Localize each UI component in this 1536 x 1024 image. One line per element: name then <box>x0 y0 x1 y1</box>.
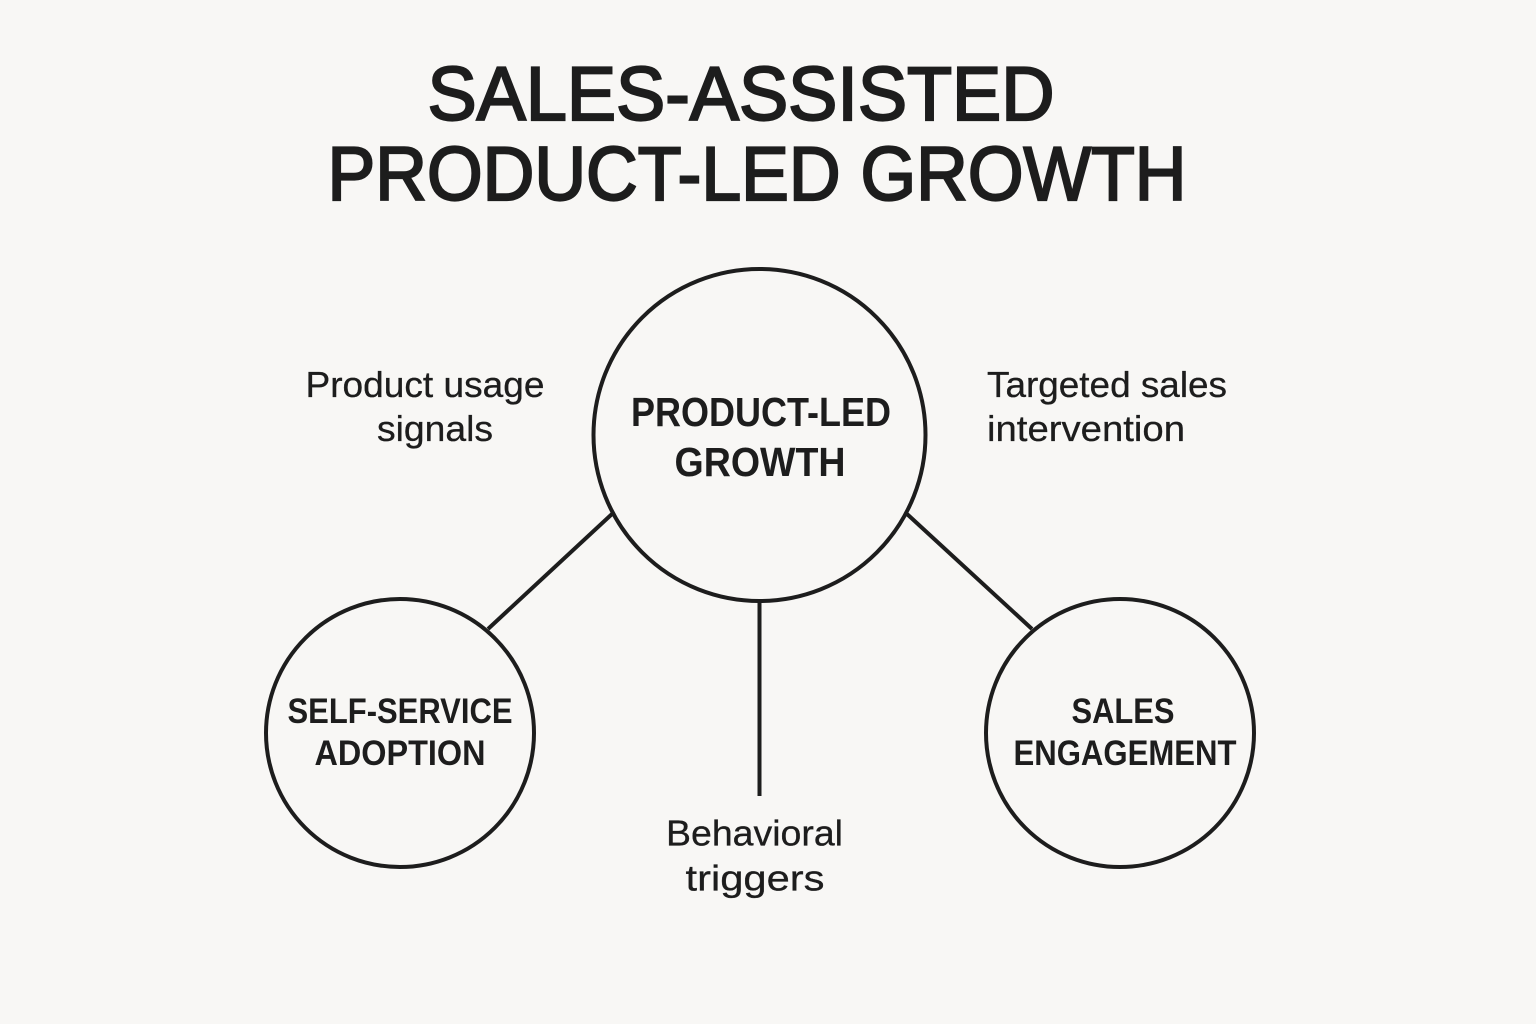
label: behavioral triggers: triggers <box>686 858 824 898</box>
circle: sales engagement: ENGAGEMENT <box>1014 734 1236 773</box>
label: product usage signals: Product usage <box>306 364 544 405</box>
label: targeted sales intervention: intervention <box>987 408 1185 449</box>
circle: sales engagement: SALES <box>1072 692 1174 731</box>
circle: self-service adoption: ADOPTION <box>314 734 486 773</box>
circle: product-led growth: PRODUCT-LED <box>631 389 891 435</box>
title: PRODUCT-LED GROWTH <box>328 132 1186 217</box>
circle: product-led growth <box>594 269 926 601</box>
connector: center to sales engagement <box>907 514 1032 629</box>
label: targeted sales intervention: Targeted sales <box>987 364 1227 405</box>
label: product usage signals <box>306 364 544 449</box>
circle: product-led growth: GROWTH <box>674 439 846 485</box>
label: product usage signals: signals <box>377 408 493 449</box>
connector: center to behavioral triggers <box>758 601 762 796</box>
label: behavioral triggers: Behavioral <box>666 812 843 854</box>
circle: self-service adoption: SELF-SERVICE <box>288 692 512 731</box>
circle: sales engagement <box>986 599 1254 867</box>
label: behavioral triggers <box>666 812 843 898</box>
title <box>328 52 1186 217</box>
connector: center to self-service adoption <box>488 514 612 629</box>
label: targeted sales intervention <box>987 364 1227 449</box>
circle: self-service adoption <box>266 599 534 867</box>
title: SALES-ASSISTED <box>428 52 1054 137</box>
